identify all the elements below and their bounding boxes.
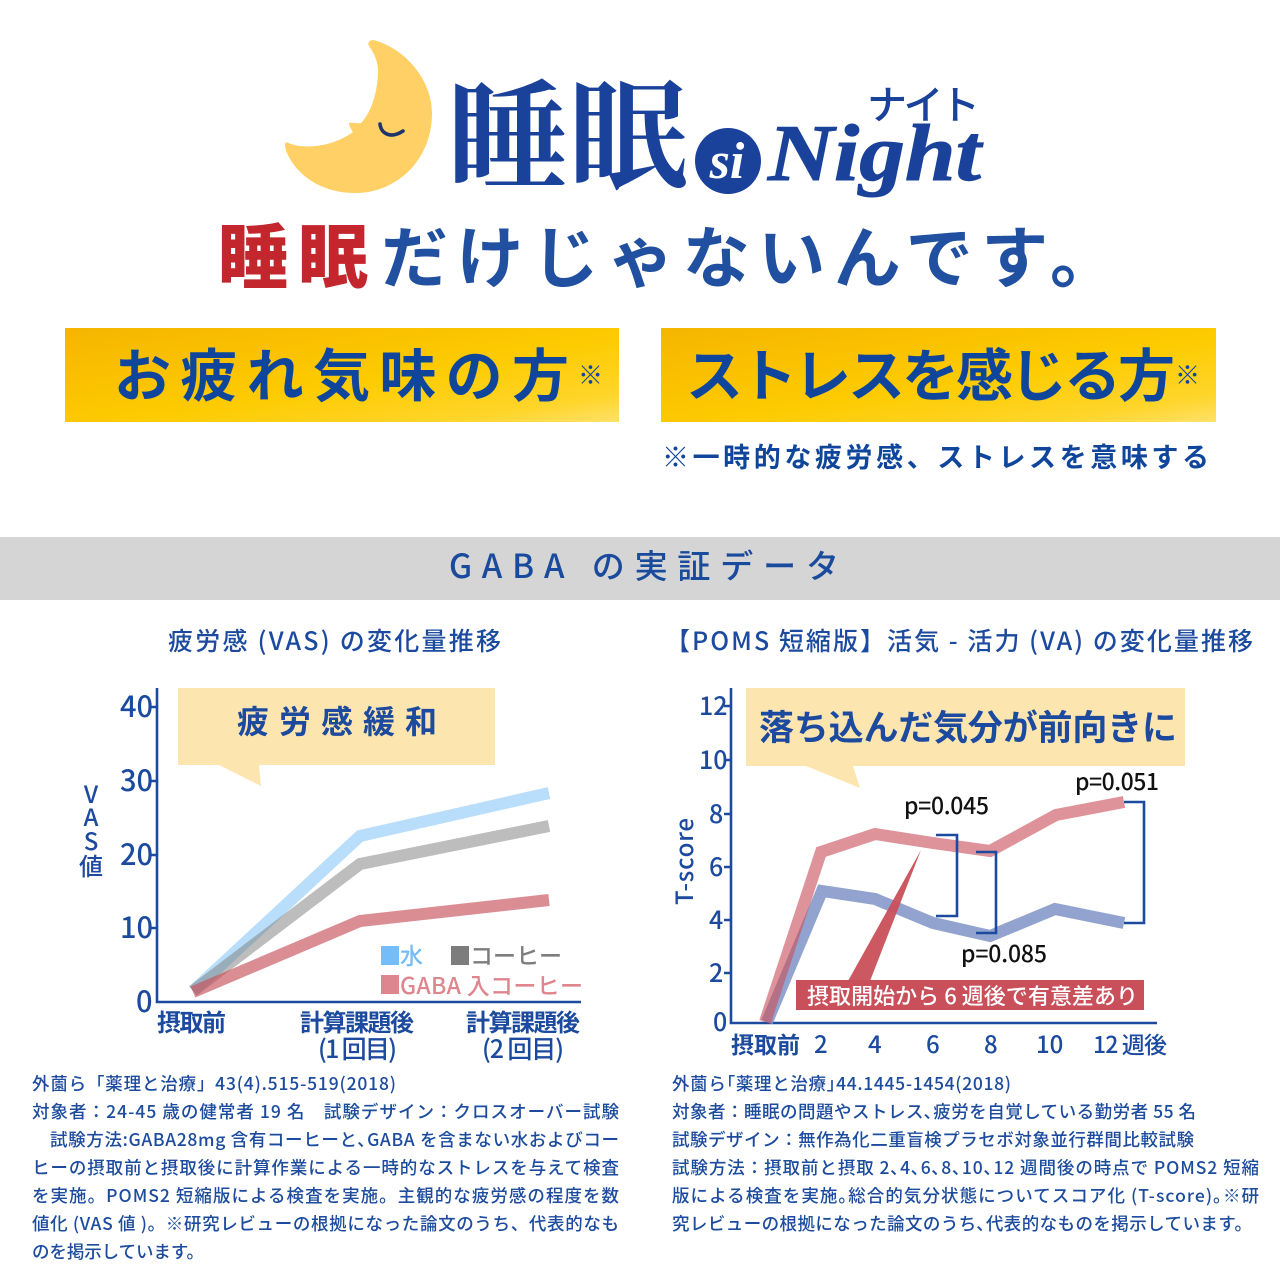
heading: VAS chart: 疲労感 (VAS) の変化量推移	[168, 622, 501, 658]
footnote: POMS study: 外薗ら｢薬理と治療｣44.1445-1454(2018)	[672, 1071, 1011, 1096]
y axis title	[79, 775, 103, 882]
legend: 水	[400, 937, 423, 971]
footnote: POMS study: 試験方法：摂取前と摂取 2､4､6､8､10､12 週間後の時点で POMS2 短縮	[672, 1155, 1259, 1180]
y tick labels: 10	[699, 741, 728, 777]
y tick labels: 0	[136, 979, 153, 1021]
y tick labels: 12	[699, 687, 728, 723]
y tick labels: 20	[120, 832, 153, 874]
footnote: VAS study	[32, 1071, 620, 1264]
y tick labels	[699, 687, 728, 1039]
callout: positive mood: 落ち込んだ気分が前向きに	[759, 700, 1177, 751]
icon: si circle: si	[709, 133, 745, 190]
line: GABA	[765, 802, 1124, 1022]
footnote: VAS study: のを掲示しています。	[32, 1239, 204, 1264]
y tick labels: 4	[709, 901, 723, 937]
footnote: POMS study: 究レビューの根拠になった論文のうち､代表的なものを掲示しています。	[672, 1211, 1252, 1236]
y axis title: 値	[79, 847, 103, 882]
line: water	[193, 793, 549, 991]
p values: p=0.085	[961, 935, 1047, 969]
banner: stressed people: ストレスを感じる方	[686, 331, 1175, 413]
banner: tired people: お疲れ気味の方	[114, 331, 569, 413]
x labels: 10	[1036, 1025, 1063, 1060]
y axis title: S	[84, 822, 98, 857]
footnote: VAS study: 対象者：24-45 歳の健常者 19 名 試験デザイン：クロスオーバー試験	[32, 1099, 620, 1124]
footnote: VAS study: 試験方法:GABA28mg 含有コーヒーと､GABA を含まない水およびコー	[50, 1127, 619, 1152]
headline: 睡眠	[218, 202, 368, 303]
section band: GABA の実証データ	[449, 540, 839, 588]
line: coffee	[193, 826, 549, 991]
footnote: POMS study: 版による検査を実施｡総合的気分状態についてスコア化 (T-score)｡※研	[672, 1183, 1259, 1208]
x labels: (1 回目)	[318, 1030, 397, 1066]
callout: fatigue relief	[178, 688, 495, 786]
footnote: POMS study: 試験デザイン：無作為化二重盲検プラセボ対象並行群間比較試験	[672, 1127, 1194, 1152]
footnote: VAS study: を実施。POMS2 短縮版による検査を実施。主観的な疲労感の程度を数	[32, 1183, 620, 1208]
x labels: 6	[926, 1025, 940, 1060]
y axis title: V	[83, 775, 99, 810]
x labels: 計算課題後	[466, 1003, 580, 1038]
y tick labels: 30	[120, 758, 153, 800]
legend: コーヒー	[470, 937, 562, 971]
chart: POMS T-score	[665, 687, 1185, 1060]
callout: significant after 6 weeks	[796, 850, 1144, 1011]
y tick labels: 8	[709, 795, 723, 831]
p values: p=0.051	[1075, 763, 1159, 797]
y tick labels: 2	[709, 954, 723, 990]
callout: positive mood	[746, 688, 1185, 788]
logo word Night: Night	[767, 110, 984, 198]
callout: fatigue relief: 疲労感緩和	[237, 697, 437, 743]
note under banners: ※一時的な疲労感、ストレスを意味する	[662, 436, 1209, 475]
x labels: (2 回目)	[482, 1030, 564, 1066]
x labels	[157, 1003, 580, 1066]
logo katakana: ナイト	[867, 73, 980, 131]
x labels: 摂取前	[157, 1003, 226, 1038]
x labels: 8	[984, 1025, 998, 1060]
footnote: POMS study: 対象者：睡眠の問題やストレス､疲労を自覚している勤労者 55 名	[672, 1099, 1196, 1124]
x labels	[731, 1025, 1167, 1060]
brackets	[936, 802, 1144, 933]
icon: si circle	[695, 128, 761, 194]
x labels: 計算課題後	[300, 1003, 414, 1038]
logo: moon and brand name	[285, 40, 984, 214]
footnote: VAS study: 外薗ら「薬理と治療」43(4).515-519(2018)	[32, 1071, 396, 1096]
x labels: 4	[868, 1025, 882, 1060]
headline: だけじゃないんです。	[381, 205, 1117, 302]
footnote: POMS study	[672, 1071, 1259, 1236]
y tick labels: 0	[713, 1003, 727, 1039]
icon: sleeping crescent moon	[285, 40, 432, 193]
y tick labels: 40	[120, 684, 153, 726]
line: placebo	[767, 891, 1124, 1022]
axes	[150, 688, 581, 1002]
footnote: VAS study: ヒーの摂取前と摂取後に計算作業による一時的なストレスを与えて検査	[32, 1155, 619, 1180]
legend: GABA 入コーヒー	[400, 967, 583, 1001]
y axis title: T-score	[665, 818, 700, 905]
axes	[724, 688, 1157, 1023]
x labels: 2	[814, 1025, 828, 1060]
banner: tired people: ※	[578, 356, 603, 392]
section band	[0, 537, 1280, 600]
y tick labels	[120, 684, 153, 1021]
banner: stressed people: ※	[1175, 356, 1200, 392]
y axis title: A	[84, 798, 99, 833]
y tick labels: 6	[709, 848, 723, 884]
p values	[904, 763, 1159, 969]
callout: significant after 6 weeks: 摂取開始から 6 週後で有意差あり	[807, 979, 1138, 1011]
logo title kanji: 睡眠	[448, 43, 688, 214]
x labels: 12 週後	[1093, 1026, 1167, 1060]
line: GABA coffee	[193, 900, 549, 992]
heading: POMS chart: 【POMS 短縮版】活気 - 活力 (VA) の変化量推移	[665, 622, 1253, 658]
footnote: VAS study: 値化 (VAS 値 )。※研究レビューの根拠になった論文のうち、代表的なも	[32, 1211, 619, 1236]
p values: p=0.045	[904, 787, 989, 821]
legend	[381, 937, 583, 1001]
x labels: 摂取前	[731, 1026, 800, 1060]
y tick labels: 10	[120, 905, 153, 947]
chart: VAS fatigue	[79, 684, 583, 1066]
